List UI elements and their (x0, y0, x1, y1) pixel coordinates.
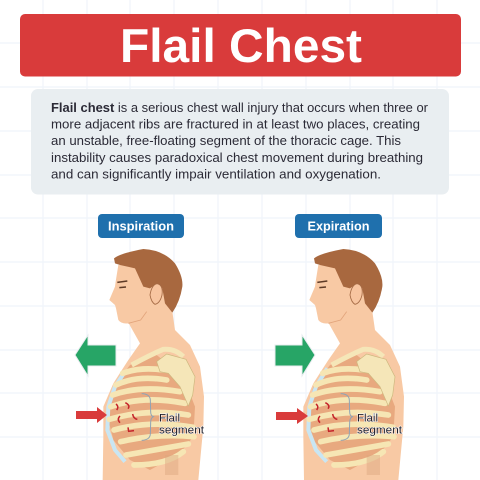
eye and brow (117, 281, 127, 288)
title banner (20, 14, 461, 76)
fracture marks (316, 403, 337, 431)
jaw line (328, 312, 347, 323)
eye and brow (317, 281, 327, 288)
label: flail segment expiration (357, 412, 402, 436)
clavicle (332, 349, 383, 365)
illustration: expiration torso (303, 249, 404, 480)
panel: definition text (31, 89, 449, 194)
ear (350, 284, 362, 304)
rib cage background (307, 355, 395, 470)
label: flail segment expiration: Flail (357, 412, 378, 424)
panel: definition text: and can significantly impair ventilation and oxygenation. (51, 166, 381, 182)
flail bracket (142, 394, 153, 440)
arrow: chest moves outward (inspiration) (75, 335, 116, 376)
jaw line (128, 312, 147, 323)
face (109, 265, 172, 324)
chest wall (107, 349, 195, 475)
heading: Expiration: Expiration (308, 220, 370, 234)
ribs (309, 369, 394, 465)
fracture marks (116, 403, 137, 431)
ear (150, 284, 162, 304)
chest wall (307, 349, 395, 475)
label: flail segment inspiration (159, 412, 204, 436)
rib cage background (107, 355, 195, 470)
costal cartilage (107, 372, 125, 462)
torso skin (103, 277, 204, 480)
torso skin (303, 277, 404, 480)
heading: Expiration (295, 214, 382, 238)
face (309, 265, 372, 324)
label: flail segment inspiration: Flail (159, 412, 180, 424)
heading: Inspiration: Inspiration (108, 220, 174, 234)
hair (114, 249, 182, 313)
panel: definition text: an unstable, free-floating segment of the thoracic cage. This (51, 133, 402, 148)
title banner: Flail Chest (120, 19, 362, 72)
label: flail segment expiration: segment (357, 424, 402, 436)
spine (165, 455, 178, 475)
arrow: red impact expiration (276, 408, 308, 424)
spine (367, 455, 380, 475)
flail bracket (341, 394, 352, 440)
heading: Inspiration (98, 214, 184, 238)
costal cartilage (308, 368, 327, 462)
head (109, 249, 182, 324)
hair (314, 249, 382, 313)
clavicle (132, 349, 183, 365)
illustration: inspiration torso (103, 249, 204, 480)
scapula (357, 354, 395, 406)
arrow: red impact inspiration (76, 407, 107, 423)
panel: definition text: more adjacent ribs are fractured in at least two places, creating (51, 116, 420, 132)
label: flail segment inspiration: segment (159, 424, 204, 436)
panel: definition text: Flail chest is a serious chest wall injury that occurs when three or (51, 100, 429, 115)
scapula (157, 354, 195, 406)
head (309, 249, 382, 324)
ribs (109, 369, 194, 465)
arrow: chest moves inward (expiration) (275, 335, 315, 376)
panel: definition text: instability causes paradoxical chest movement during breathing (51, 150, 423, 165)
